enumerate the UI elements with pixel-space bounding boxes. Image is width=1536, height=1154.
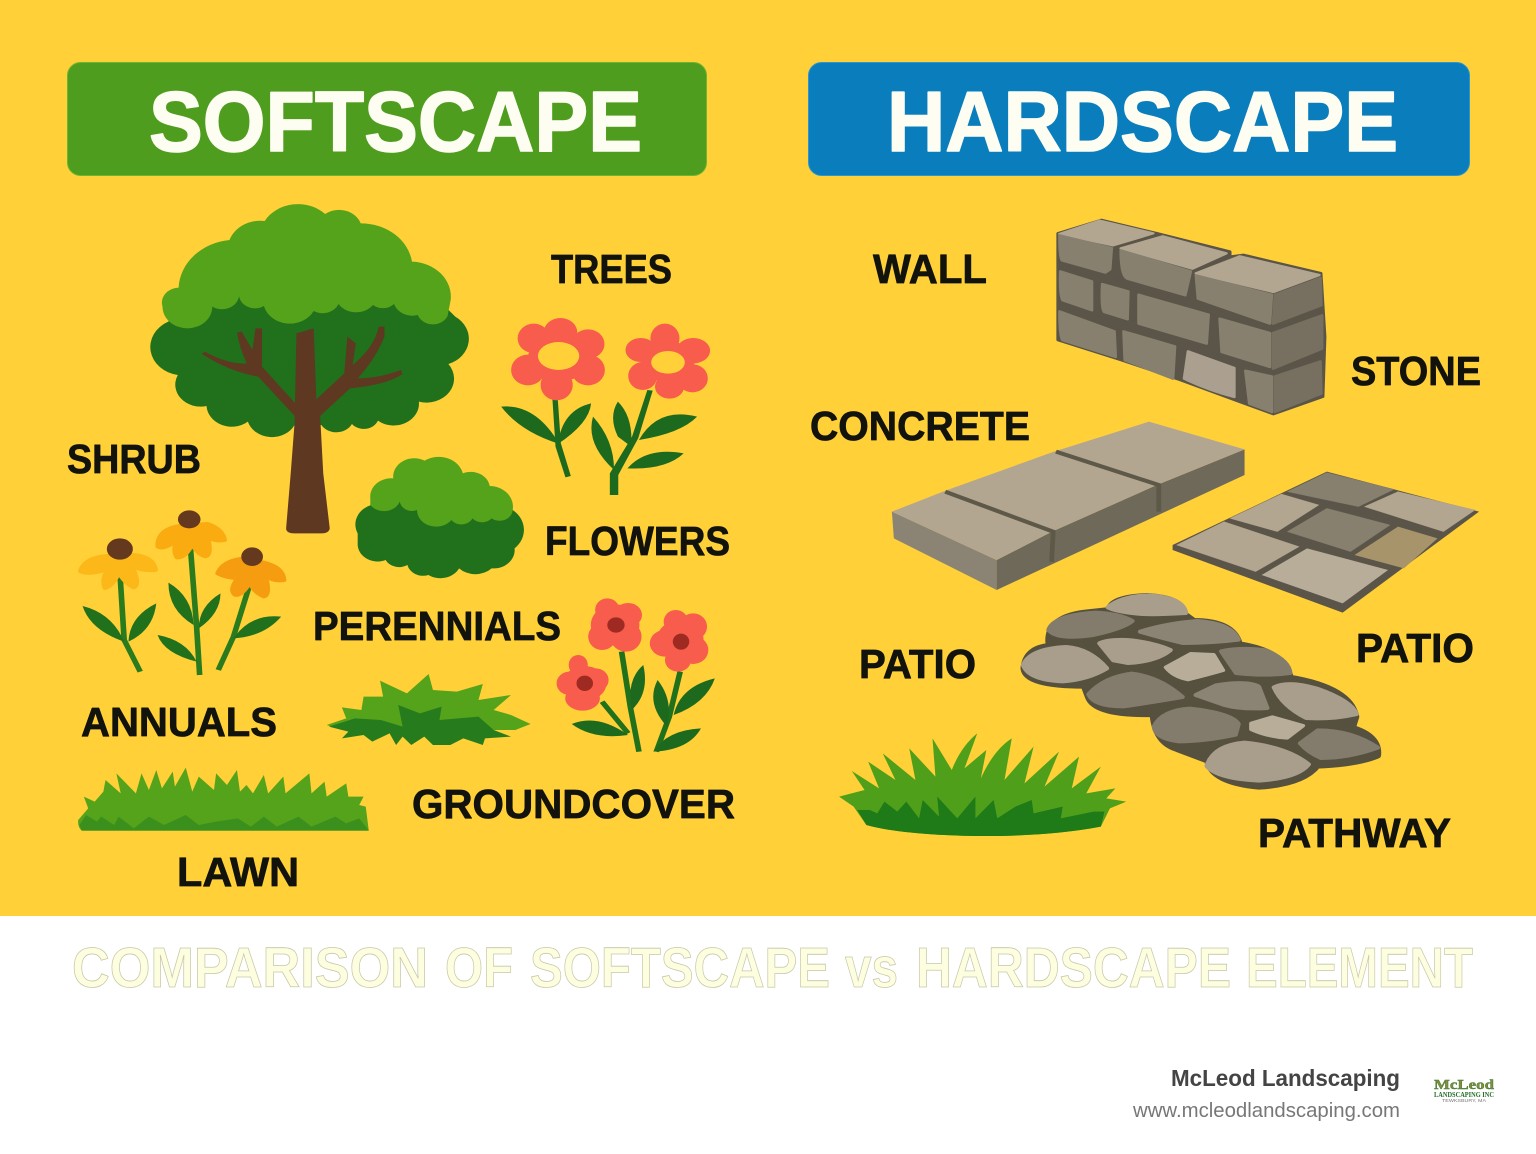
heading: hardscape [808,62,1470,176]
title: comparison caption: HARDSCAPE [916,936,1231,1000]
icon: stone pathway [1023,595,1378,786]
yellow background panel [0,0,1536,916]
panel: hardscape [808,62,1481,856]
title: comparison caption: SOFTSCAPE [530,936,830,1000]
logo: McLeod Landscaping [1434,1078,1494,1103]
label: patio right: PATIO [1356,625,1474,671]
title: comparison caption: vs [845,936,898,1000]
icon: tree [150,204,469,533]
panel: softscape [67,62,735,895]
icon: yellow perennials [81,510,284,675]
icon: red annual flowers [557,598,715,752]
title: comparison caption [72,936,1473,1000]
icon: red flowers [501,318,710,495]
icon: grass tuft [839,733,1126,836]
white footer band [0,916,1536,1154]
label: perennials: PERENNIALS [313,603,561,649]
icon: concrete slab [892,422,1245,590]
icon: lawn [78,768,369,831]
heading: softscape [68,62,706,176]
title: comparison caption: ELEMENT [1246,936,1473,1000]
label: pathway: PATHWAY [1258,810,1451,856]
label: shrub: SHRUB [67,436,201,482]
logo: McLeod Landscaping: McLeod [1434,1078,1494,1093]
heading: hardscape: HARDSCAPE [887,75,1398,170]
icon: patio tiles [1173,472,1479,613]
label: flowers: FLOWERS [545,518,730,564]
label: patio left: PATIO [859,641,976,687]
title: comparison caption: OF [445,936,513,1000]
logo: McLeod Landscaping: TEWKSBURY, MA [1442,1098,1486,1103]
icon: stone wall [1058,220,1325,414]
label: stone: STONE [1351,348,1481,394]
icon: groundcover [327,674,531,745]
heading: softscape: SOFTSCAPE [149,75,642,170]
icon: shrub [355,457,524,578]
logo: McLeod Landscaping: LANDSCAPING INC [1434,1090,1494,1099]
label: wall: WALL [873,246,987,292]
footer: website: www.mcleodlandscaping.com [1132,1100,1400,1122]
label: annuals: ANNUALS [81,699,277,745]
title: comparison caption: COMPARISON [72,936,428,1000]
label: groundcover: GROUNDCOVER [412,781,735,827]
label: lawn: LAWN [177,849,299,895]
footer: company name: McLeod Landscaping [1171,1065,1400,1091]
label: concrete: CONCRETE [810,403,1030,449]
label: trees: TREES [551,246,672,292]
